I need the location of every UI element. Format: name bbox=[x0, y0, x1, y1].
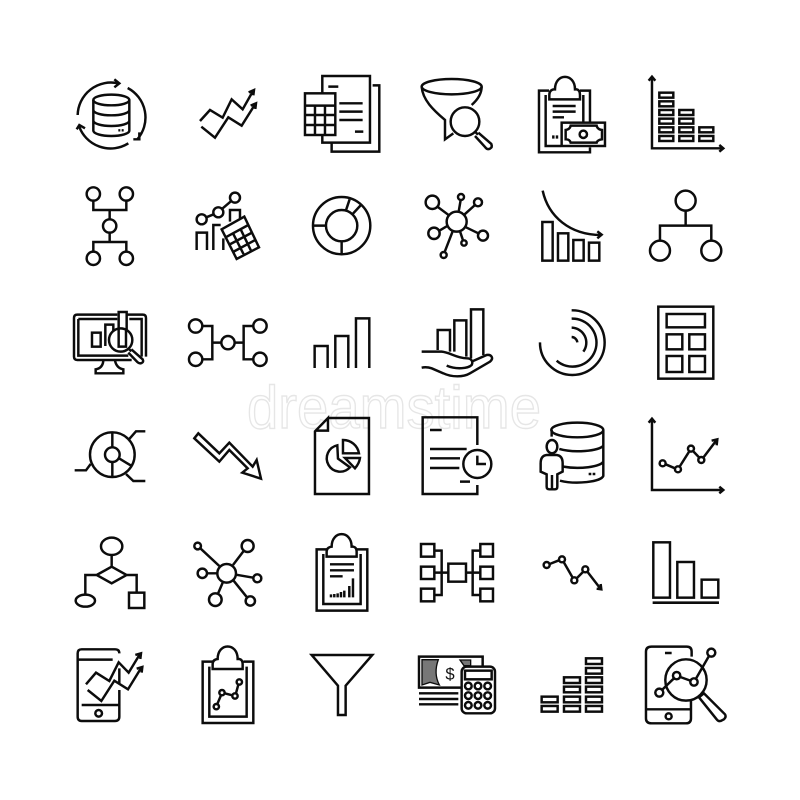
icons: rows 5-6, columns 4-6 bbox=[419, 542, 726, 723]
icon: ascending stacked bars bbox=[542, 658, 602, 712]
icon: network hub with seven nodes bbox=[426, 194, 488, 258]
icon: database with person bbox=[541, 423, 603, 489]
icon: clipboard with line chart bbox=[203, 646, 253, 723]
icon: banknotes with calculator bbox=[419, 657, 495, 713]
icon: document with pie chart bbox=[315, 418, 369, 494]
icon: flowchart bbox=[76, 538, 144, 608]
icon: radial arcs chart bbox=[540, 310, 605, 375]
icon: network hub with six nodes bbox=[194, 540, 261, 606]
icon: hand holding bar chart bbox=[422, 309, 492, 376]
icon: funnel with magnifier bbox=[422, 79, 492, 149]
icon: database with cycle arrows bbox=[77, 79, 145, 148]
icon: clipboard with banknote bbox=[539, 77, 605, 152]
icon: line chart on axes bbox=[649, 419, 723, 493]
icon: declining bars with curve bbox=[542, 191, 602, 261]
icon: falling line with dots bbox=[544, 556, 601, 589]
icon: funnel bbox=[312, 655, 372, 715]
icon: three descending bars bbox=[653, 542, 719, 603]
icon: descending stacked bar chart bbox=[649, 77, 723, 152]
icon: circular diagram with connectors bbox=[75, 431, 145, 481]
icon: smartphone with magnified chart bbox=[646, 647, 726, 723]
icon: calculator bbox=[658, 307, 713, 379]
icon: smartphone with rising arrows bbox=[78, 649, 142, 721]
icon: hierarchy bbox=[650, 191, 721, 261]
icons: rows 1-2, columns 1-3 bbox=[77, 76, 379, 265]
icon: spreadsheet documents bbox=[305, 76, 379, 152]
icon: rising zigzag arrows bbox=[200, 90, 256, 138]
icon: banknotes with calculator: $ bbox=[445, 664, 455, 683]
icon: falling arrow bbox=[194, 433, 261, 479]
icon: box tree diagram bbox=[421, 544, 493, 601]
icon: monitor with analysis chart bbox=[74, 312, 146, 373]
icon: chart with calculator bbox=[197, 193, 259, 259]
icon: ascending bar chart bbox=[315, 318, 369, 368]
icon: clipboard with small bars bbox=[317, 534, 367, 611]
icons: rows 3-4, columns 1-3 bbox=[74, 312, 369, 494]
icons: rows 3-4, columns 4-6 bbox=[422, 307, 723, 494]
icon: document with clock bbox=[423, 417, 491, 494]
watermark: dreamstime bbox=[247, 374, 541, 441]
icon: donut chart bbox=[313, 197, 370, 254]
icons: rows 5-6, columns 1-3 bbox=[76, 534, 372, 723]
icons: rows 1-2, columns 4-6 bbox=[422, 77, 723, 261]
icon: five node tree bbox=[87, 187, 133, 265]
icon: branching node diagram bbox=[189, 319, 267, 366]
